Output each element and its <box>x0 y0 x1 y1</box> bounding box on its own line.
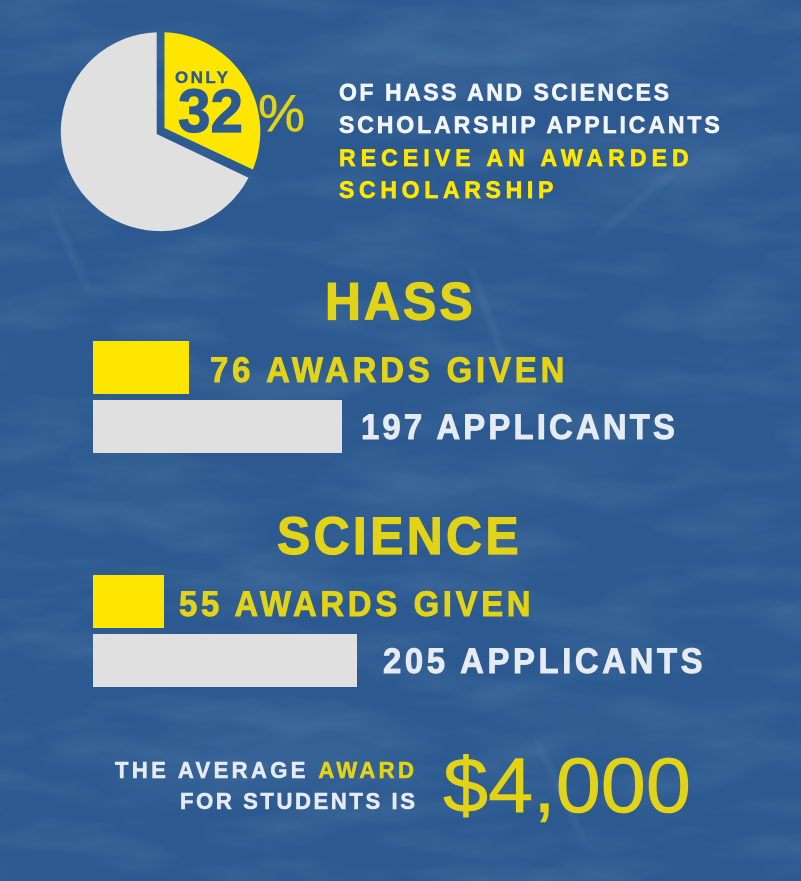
average award callout <box>115 741 691 829</box>
bar: 76 awards given <box>93 341 189 394</box>
text line: receive an awarded: RECEIVE AN AWARDED <box>339 144 689 172</box>
text line: scholarship applicants: SCHOLARSHIP APPLICANTS <box>339 111 720 139</box>
section: HASS <box>93 271 675 453</box>
bar: 197 applicants <box>93 400 342 453</box>
label: 197 applicants: 197 APPLICANTS <box>361 408 675 447</box>
headline text <box>339 79 720 204</box>
heading: SCIENCE: SCIENCE <box>277 506 519 565</box>
label: 205 applicants: 205 APPLICANTS <box>383 642 703 681</box>
bar: 205 applicants <box>93 634 357 687</box>
heading: HASS: HASS <box>325 271 473 331</box>
label: 55 awards given: 55 AWARDS GIVEN <box>179 585 531 624</box>
bar: 55 awards given <box>93 575 164 628</box>
pie slice: 32 percent share <box>164 32 260 170</box>
section: SCIENCE <box>93 506 703 687</box>
text line: of hass and sciences: OF HASS AND SCIENCES <box>339 79 669 107</box>
label: 32: 32 <box>178 77 243 145</box>
label: 76 awards given: 76 AWARDS GIVEN <box>210 351 564 390</box>
label: only: ONLY <box>175 68 229 87</box>
label: percent sign: % <box>258 85 305 143</box>
pie slice: remaining share <box>61 32 248 231</box>
pie chart: 32 percent <box>61 32 305 231</box>
amount: $4,000: $4,000 <box>443 741 691 829</box>
text line: for students is: FOR STUDENTS IS <box>180 787 415 814</box>
text line: scholarship: SCHOLARSHIP <box>339 176 553 204</box>
text line: the average award: THE AVERAGE AWARD <box>115 756 414 783</box>
